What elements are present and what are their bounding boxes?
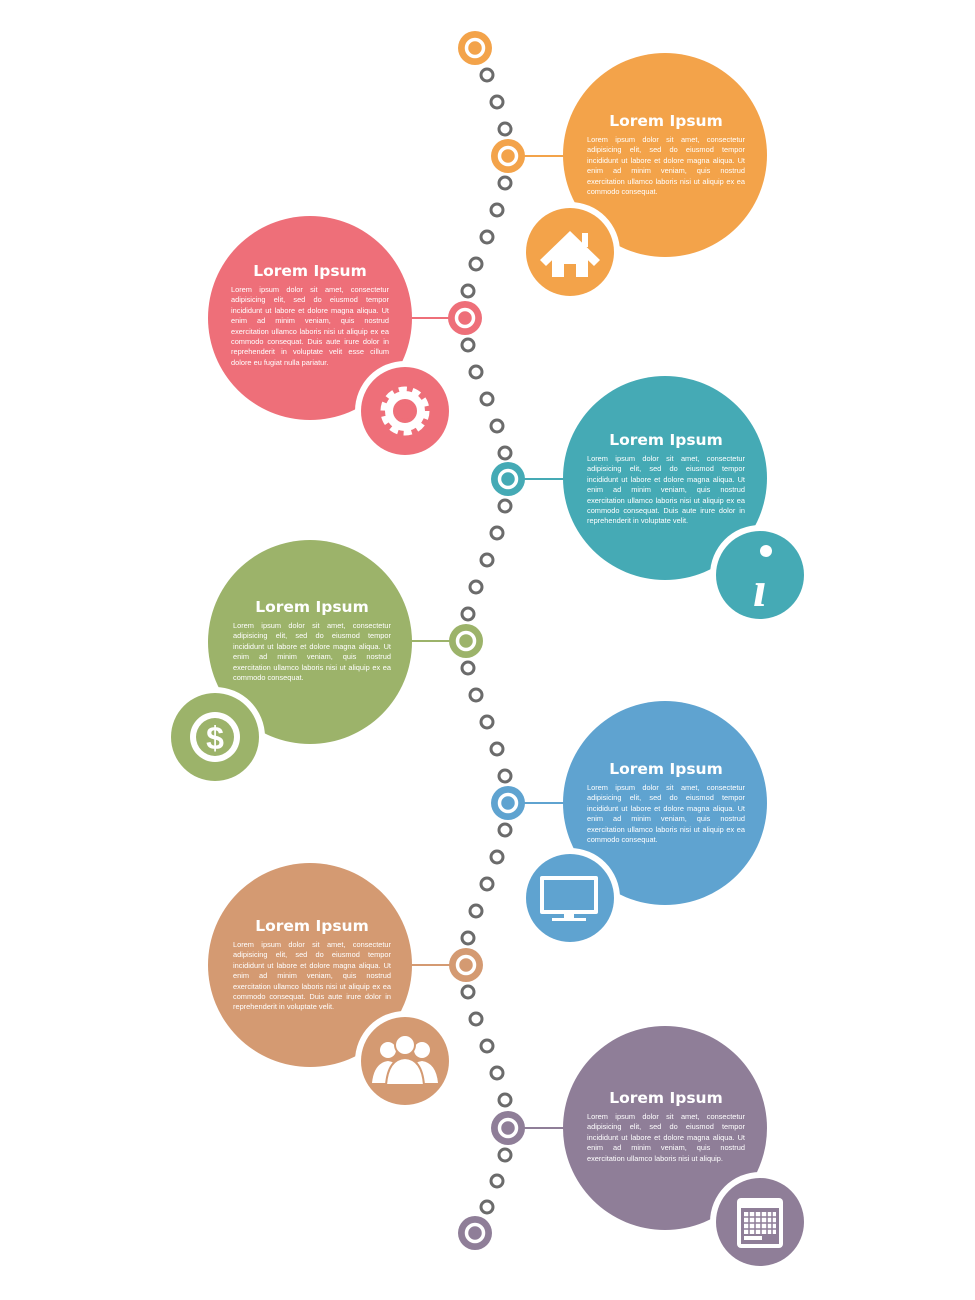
text: step 5: Lorem ipsum dolor sit amet, consectetur adipisicing elit, sed do eiusmod tempor incididunt ut labore et dolore magna aliqua. Ut enim ad minim veniam, quis nostrud exercitation ullamco laboris nisi ut aliquip ex ea commodo consequat. xyxy=(587,783,745,844)
text: step 2: Lorem ipsum dolor sit amet, consectetur adipisicing elit, sed do eiusmod tempor incididunt ut labore et dolore magna aliqua. Ut enim ad minim veniam, quis nostrud exercitation ullamco laboris nisi ut aliquip ex ea commodo consequat. Duis aute irure dolor in reprehenderit in voluptate velit esse cillum dolore eu fugiat nulla pariatur. xyxy=(231,285,389,367)
step 3 teal xyxy=(491,376,810,625)
text: step 7: Lorem Ipsum xyxy=(609,1089,723,1107)
icon: dollar coin xyxy=(190,712,240,762)
step 5 blue xyxy=(491,701,767,948)
text: step 7: Lorem ipsum dolor sit amet, consectetur adipisicing elit, sed do eiusmod tempor incididunt ut labore et dolore magna aliqua. Ut enim ad minim veniam, quis nostrud exercitation ullamco laboris nisi ut aliquip. xyxy=(587,1112,745,1163)
text: step 1: Lorem ipsum dolor sit amet, consectetur adipisicing elit, sed do eiusmod tempor incididunt ut labore et dolore magna aliqua. Ut enim ad minim veniam, quis nostrud exercitation ullamco laboris nisi ut aliquip ex ea commodo consequat. xyxy=(587,135,745,196)
text: step 6: Lorem Ipsum xyxy=(255,917,369,935)
start node xyxy=(458,31,492,65)
text: step 4: Lorem Ipsum xyxy=(255,598,369,616)
icon: monitor xyxy=(540,876,598,921)
icon: dollar coin: $ xyxy=(206,720,224,756)
text: step 7 xyxy=(587,1089,745,1163)
end node xyxy=(458,1216,492,1250)
text: step 6: Lorem ipsum dolor sit amet, consectetur adipisicing elit, sed do eiusmod tempor incididunt ut labore et dolore magna aliqua. Ut enim ad minim veniam, quis nostrud exercitation ullamco laboris nisi ut aliquip ex ea commodo consequat. Duis aute irure dolor in reprehenderit in voluptate velit. xyxy=(233,940,391,1011)
icon: gear xyxy=(386,392,424,430)
icon: info: ı xyxy=(753,561,767,617)
text: step 1: Lorem Ipsum xyxy=(609,112,723,130)
step 7 purple xyxy=(491,1026,810,1272)
text: step 3: Lorem Ipsum xyxy=(609,431,723,449)
text: step 4: Lorem ipsum dolor sit amet, consectetur adipisicing elit, sed do eiusmod tempor incididunt ut labore et dolore magna aliqua. Ut enim ad minim veniam, quis nostrud exercitation ullamco laboris nisi ut aliquip ex ea commodo consequat. xyxy=(233,621,391,682)
icon: info xyxy=(753,545,772,617)
step 4 green xyxy=(165,540,483,787)
icon: calendar xyxy=(737,1198,783,1248)
step 6 tan xyxy=(208,863,483,1111)
text: step 3: Lorem ipsum dolor sit amet, consectetur adipisicing elit, sed do eiusmod tempor incididunt ut labore et dolore magna aliqua. Ut enim ad minim veniam, quis nostrud exercitation ullamco laboris nisi ut aliquip ex ea commodo consequat. Duis aute irure dolor in reprehenderit in voluptate velit. xyxy=(587,454,745,525)
text: step 2: Lorem Ipsum xyxy=(253,262,367,280)
step 1 orange xyxy=(491,53,767,302)
text: step 5: Lorem Ipsum xyxy=(609,760,723,778)
icon: people xyxy=(372,1035,438,1085)
step 2 red xyxy=(208,216,482,461)
icon: house xyxy=(540,231,600,277)
timeline chain dots xyxy=(462,69,511,1213)
